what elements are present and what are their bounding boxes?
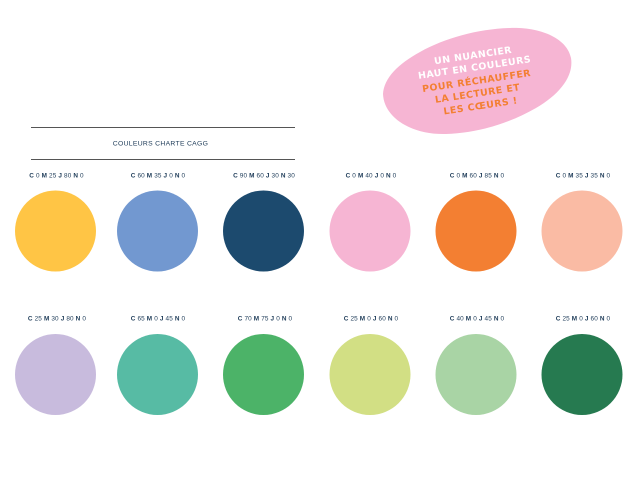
slogan text: LA LECTURE ET <box>434 82 521 106</box>
callout: pink blob with slogan <box>383 28 571 134</box>
swatch: peach: C 0 M 35 J 35 N 0 <box>556 172 611 180</box>
slogan text: LES CŒURS ! <box>443 96 518 117</box>
swatch: navy: C 90 M 60 J 30 N 30 <box>233 172 295 180</box>
swatch: pale green: C 40 M 0 J 45 N 0 <box>450 316 505 322</box>
swatch: orange <box>436 172 516 272</box>
swatch: dark green <box>542 316 622 415</box>
swatch: teal: C 65 M 0 J 45 N 0 <box>131 316 186 322</box>
swatch: teal <box>117 316 198 415</box>
swatch: yellow <box>15 172 96 272</box>
swatch: lilac: C 25 M 30 J 80 N 0 <box>28 316 86 322</box>
swatch: green: C 70 M 75 J 0 N 0 <box>238 316 293 322</box>
swatch: green <box>223 316 304 415</box>
swatch: navy <box>223 172 304 272</box>
swatch: pale green <box>436 316 516 415</box>
heading: couleurs charte CAGG: COULEURS CHARTE CAGG <box>113 140 208 148</box>
slogan text: HAUT EN COULEURS <box>417 54 532 82</box>
swatch: blue: C 60 M 35 J 0 N 0 <box>131 172 186 180</box>
swatch: blue <box>117 172 198 272</box>
slogan text: POUR RÉCHAUFFER <box>421 67 532 95</box>
swatch: lime: C 25 M 0 J 60 N 0 <box>344 316 399 322</box>
swatch: peach <box>542 172 622 272</box>
slogan text <box>417 45 532 117</box>
swatch: lilac <box>15 316 96 415</box>
swatch: orange: C 0 M 60 J 85 N 0 <box>450 172 505 180</box>
swatch: pink <box>330 172 410 272</box>
swatch: lime <box>330 316 410 415</box>
blob shape <box>383 28 571 134</box>
swatch: pink: C 0 M 40 J 0 N 0 <box>346 172 397 180</box>
slogan text: UN NUANCIER <box>433 45 513 67</box>
swatch: yellow: C 0 M 25 J 80 N 0 <box>29 172 84 180</box>
swatch: dark green: C 25 M 0 J 60 N 0 <box>556 316 611 322</box>
